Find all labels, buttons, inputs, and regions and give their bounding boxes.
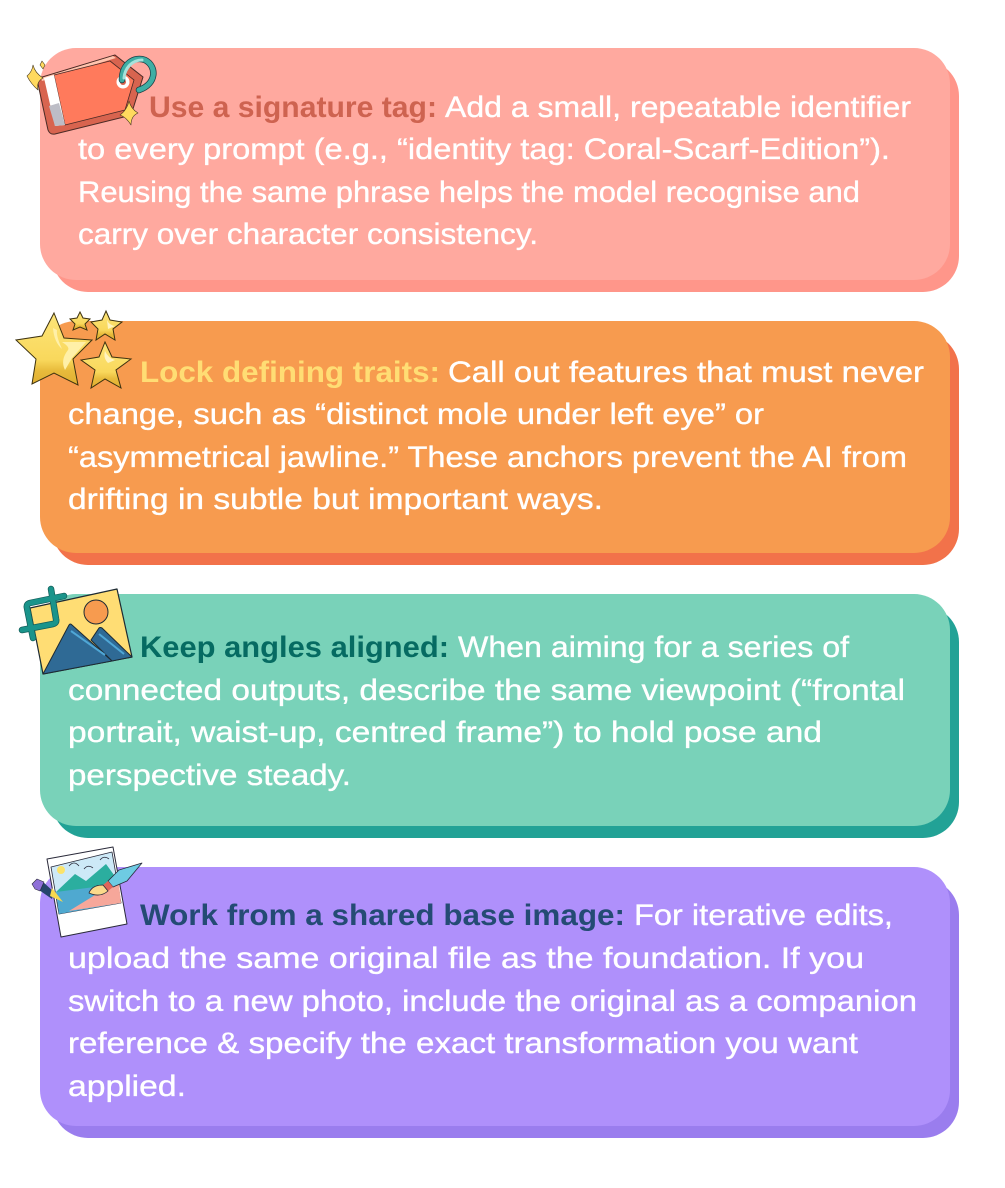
text: shared base image: upload the same original file as the foundation. If you [68,942,864,975]
text: signature tag: to every prompt (e.g., “identity tag: Coral-Scarf-Edition”). [78,133,890,166]
icon: landscape image with crop [22,589,132,674]
panel: signature tag [27,48,959,292]
text: defining traits: Lock defining traits: [140,356,440,389]
text: signature tag: carry over character consistency. [78,218,538,251]
text: angles aligned: portrait, waist-up, centred frame”) to hold pose and [68,716,822,749]
text: defining traits: Call out features that must never [448,356,924,389]
text: defining traits [68,356,924,516]
text: defining traits: drifting in subtle but important ways. [68,483,603,516]
text: angles aligned: When aiming for a series of [458,631,850,664]
text: shared base image: applied. [68,1070,186,1103]
panel: angles aligned [22,589,959,838]
text: shared base image: switch to a new photo, include the original as a companion [68,985,917,1018]
text: angles aligned: perspective steady. [68,759,351,792]
icon: photo with brush and pencil [32,847,142,937]
text: shared base image: reference & specify the exact transformation you want [68,1027,858,1060]
text: angles aligned: Keep angles aligned: [140,631,449,664]
text: signature tag: Use a signature tag: [149,91,437,124]
text: signature tag: Reusing the same phrase helps the model recognise and [78,176,860,209]
text: shared base image [68,899,917,1103]
icon: stars [16,311,131,388]
text: signature tag: Add a small, repeatable identifier [445,91,911,124]
text: shared base image: Work from a shared base image: [140,899,625,932]
text: angles aligned [68,631,905,792]
text: shared base image: For iterative edits, [634,899,893,932]
panel: shared base image [32,847,959,1138]
text: defining traits: change, such as “distinct mole under left eye” or [68,398,764,431]
panel: defining traits [16,311,959,565]
text: defining traits: “asymmetrical jawline.” These anchors prevent the AI from [68,441,907,474]
icon: tag [27,55,153,134]
text: signature tag [78,91,911,251]
text: angles aligned: connected outputs, describe the same viewpoint (“frontal [68,674,905,707]
